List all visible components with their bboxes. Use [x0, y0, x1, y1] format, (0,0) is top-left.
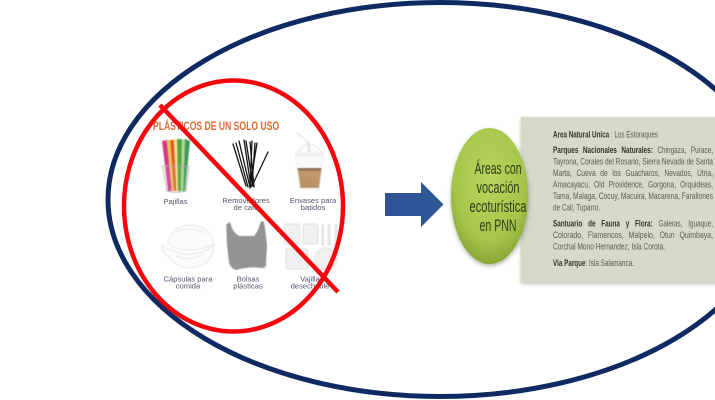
green ellipse: ecotourism areas: ecoturística	[470, 197, 527, 216]
icon: disposable tableware	[284, 224, 337, 270]
label: tableware: Vajilla	[300, 274, 321, 284]
text: Area Natural Unica: Area Natural Unica : Los Estoraques	[553, 130, 658, 140]
panel: list of protected areas	[521, 117, 715, 284]
green ellipse: ecotourism areas: vocación	[476, 178, 520, 197]
text: Santuario de Fauna y Flora: Corchal Mono Hernandez, Isla Corota.	[553, 242, 665, 252]
label: capsules: Cápsulas para	[164, 274, 213, 284]
label: straws: Pajillas	[163, 197, 188, 206]
panel: single-use plastics: de café	[234, 203, 258, 212]
text: Parques Nacionales Naturales	[553, 145, 713, 214]
panel: single-use plastics: plásticas	[233, 282, 263, 290]
green ellipse: ecotourism areas: en PNN	[480, 216, 516, 235]
prohibition sign	[124, 80, 343, 332]
icon: coffee stirrers	[233, 140, 268, 188]
text: Via Parque: Via Parque: Isla Salamanca.	[553, 258, 634, 269]
icon: plastic bag	[226, 221, 267, 270]
green ellipse: ecotourism areas: Áreas con	[474, 159, 522, 178]
panel: single-use plastics	[124, 80, 343, 332]
text: Santuario de Fauna y Flora	[553, 218, 713, 252]
green ellipse: ecotourism areas	[451, 128, 529, 266]
panel: single-use plastics: comida	[176, 282, 201, 290]
label: bags: Bolsas	[237, 274, 260, 284]
icon: straws in a cup	[162, 139, 190, 192]
label: shake containers: Envases para	[290, 196, 337, 205]
icon: food capsule	[162, 225, 214, 268]
label: stirrers: Removedores	[222, 196, 270, 205]
panel: single-use plastics: batidos	[301, 203, 325, 212]
panel: single-use plastics: desechable	[291, 282, 329, 290]
heading: plastics: PLÁSTICOS DE UN SOLO USO	[153, 120, 279, 133]
arrow	[385, 182, 444, 227]
icon: milkshake cup	[294, 133, 325, 190]
text: Parques Nacionales Naturales: de Cali, Tuparro.	[553, 202, 600, 214]
